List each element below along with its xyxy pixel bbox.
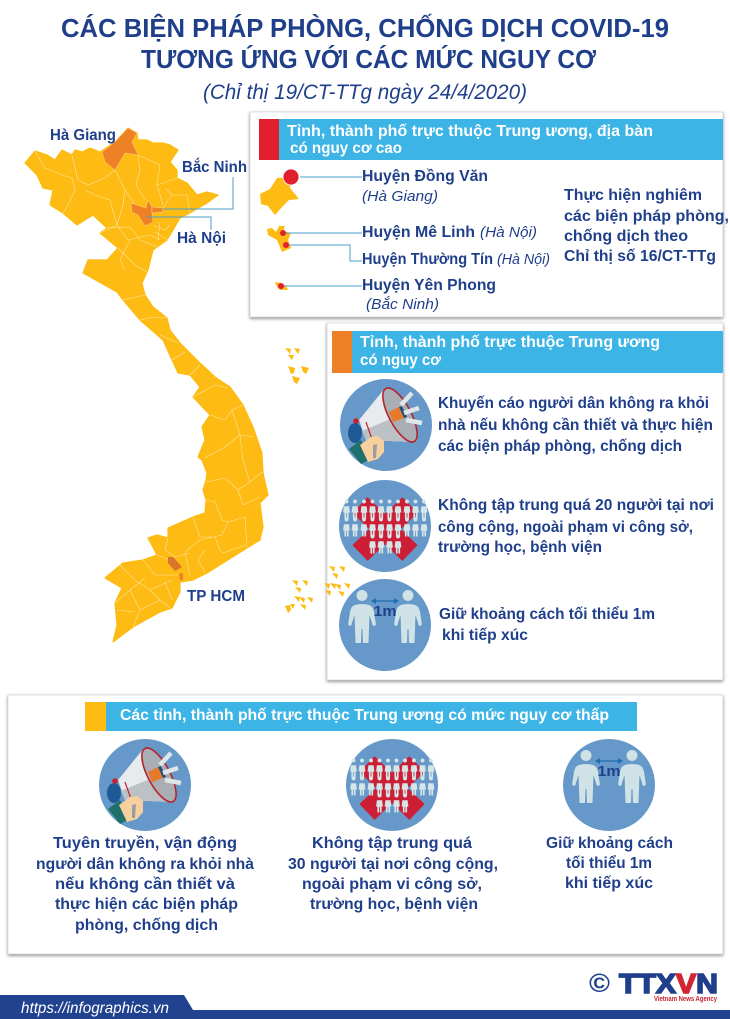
text: communication advice: thực hiện các biện pháp: [55, 896, 238, 913]
district: Yên Phong: (Bắc Ninh): [366, 296, 439, 313]
text: communication advice: nếu không cần thiết và: [55, 876, 235, 893]
text: stay at home advice: Khuyến cáo người dân không ra khỏi: [438, 395, 709, 412]
map leader: Bắc Ninh: [163, 177, 233, 209]
text: no gatherings over 30: Không tập trung quá: [312, 835, 472, 852]
panel header: low risk: Các tỉnh, thành phố trực thuộc Trung ương có mức nguy cơ thấp: [120, 707, 609, 724]
text: stay at home advice: [438, 395, 713, 455]
map label: Hà Nội: Hà Nội: [177, 230, 226, 247]
text: keep 1m distance: Giữ khoảng cách tối thiểu 1m: [439, 606, 655, 623]
text: no gatherings over 20: trường học, bệnh viện: [438, 539, 602, 556]
map: Vietnam risk levels: [25, 128, 309, 642]
district: Mê Linh: (Hà Nội): [480, 224, 537, 241]
map leader: Hà Nội: [147, 217, 211, 230]
panel header: at risk: [332, 331, 723, 373]
text: no gatherings over 30: 30 người tại nơi công cộng,: [288, 856, 498, 873]
logo: TTXVN: Vietnam News Agency: [654, 996, 717, 1003]
text: stay at home advice: các biện pháp phòng, chống dịch: [438, 438, 682, 455]
district: Thường Tín: (Hà Nội): [497, 251, 550, 268]
text: communication advice: người dân không ra khỏi nhà: [36, 856, 254, 873]
text: communication advice: Tuyên truyền, vận động: [53, 835, 237, 852]
map: province borders: [35, 151, 262, 627]
title: CÁC BIỆN PHÁP PHÒNG, CHỐNG DỊCH COVID-19: [61, 13, 669, 43]
map: Hà Giang highlighted: [102, 128, 138, 170]
panel header: high risk: Tỉnh, thành phố trực thuộc Trung ương, địa bàn: [287, 123, 653, 140]
map: Trường Sa islands: [285, 566, 350, 613]
icon: 1m distance: [563, 739, 655, 831]
text: no gatherings over 20: [438, 497, 714, 556]
text: communication advice: phòng, chống dịch: [75, 917, 218, 934]
map: TP HCM highlighted: [168, 557, 182, 571]
district: Yên Phong: Huyện Yên Phong: [362, 277, 496, 294]
text: no gatherings over 30: [288, 835, 498, 913]
icon: 1m distance: [339, 579, 431, 671]
icon: Hà Nội with markers: [267, 226, 362, 261]
district: Yên Phong: [362, 277, 496, 313]
text: keep 1m distance: [439, 606, 655, 644]
subtitle: (Chỉ thị 19/CT-TTg ngày 24/4/2020): [203, 81, 527, 104]
map: Bắc Ninh highlighted: [152, 207, 163, 213]
text: no gatherings over 20: công cộng, ngoài phạm vi công sở,: [438, 519, 693, 536]
map label: Bắc Ninh: Bắc Ninh: [182, 158, 247, 176]
text: communication advice: [36, 835, 254, 934]
icon: megaphone: [340, 379, 432, 471]
high risk measure text: Chỉ thị số 16/CT-TTg: [564, 248, 716, 265]
map label: TP HCM: TP HCM: [187, 588, 245, 605]
title: TƯƠNG ỨNG VỚI CÁC MỨC NGUY CƠ: [141, 44, 597, 74]
panel header: low risk: [85, 702, 637, 731]
text: keep 1m distance: Giữ khoảng cách: [546, 835, 673, 852]
text: no gatherings over 20: Không tập trung quá 20 người tại nơi: [438, 497, 714, 514]
text: keep 1m distance: khi tiếp xúc: [442, 627, 528, 644]
map label: Hà Giang: Hà Giang: [50, 127, 116, 144]
panel: high risk: [250, 112, 729, 317]
logo: TTXVN: TTXVN: [619, 968, 718, 999]
map: Hà Nội highlighted: [131, 200, 153, 226]
footer url: https://infographics.vn: [21, 1000, 169, 1017]
icon: megaphone: [99, 739, 191, 831]
district: Thường Tín: Huyện Thường Tín: [362, 251, 493, 268]
text: no gatherings over 30: ngoài phạm vi công sở,: [302, 876, 482, 893]
panel header: at risk: có nguy cơ: [360, 352, 442, 369]
panel: at risk: [327, 323, 723, 680]
logo: TTXVN: ©: [589, 968, 610, 998]
text: keep 1m distance: tối thiểu 1m: [566, 855, 652, 872]
logo: TTXVN: [589, 968, 718, 1003]
text: keep 1m distance: khi tiếp xúc: [565, 875, 653, 892]
high risk measure text: các biện pháp phòng,: [564, 208, 729, 225]
panel header: at risk: Tỉnh, thành phố trực thuộc Trung ương: [360, 334, 660, 351]
panel header: high risk: [259, 119, 723, 160]
icon: crowd crossed out: [346, 739, 438, 831]
icon: Bắc Ninh with marker: [275, 282, 362, 290]
title: [61, 13, 669, 74]
footer band: [0, 995, 730, 1019]
panel header: high risk: có nguy cơ cao: [290, 140, 402, 157]
high risk measure text: chống dịch theo: [564, 228, 688, 245]
panel: low risk: [8, 695, 723, 954]
high risk measure text: Thực hiện nghiêm: [564, 187, 702, 204]
icon: crowd crossed out: [339, 480, 431, 572]
text: keep 1m distance: [546, 835, 673, 892]
district: Đồng Văn: (Hà Giang): [362, 188, 438, 205]
text: stay at home advice: nhà nếu không cần thiết và thực hiện: [438, 417, 713, 434]
district: Đồng Văn: Huyện Đồng Văn: [362, 168, 488, 185]
text: no gatherings over 30: trường học, bệnh viện: [310, 896, 478, 913]
district: Mê Linh: [362, 224, 537, 241]
map: Hoàng Sa islands: [285, 348, 309, 384]
high risk measure text: [564, 187, 729, 265]
icon: Hà Giang with marker: [260, 169, 362, 215]
district: Đồng Văn: [362, 168, 488, 205]
district: Mê Linh: Huyện Mê Linh: [362, 224, 475, 241]
